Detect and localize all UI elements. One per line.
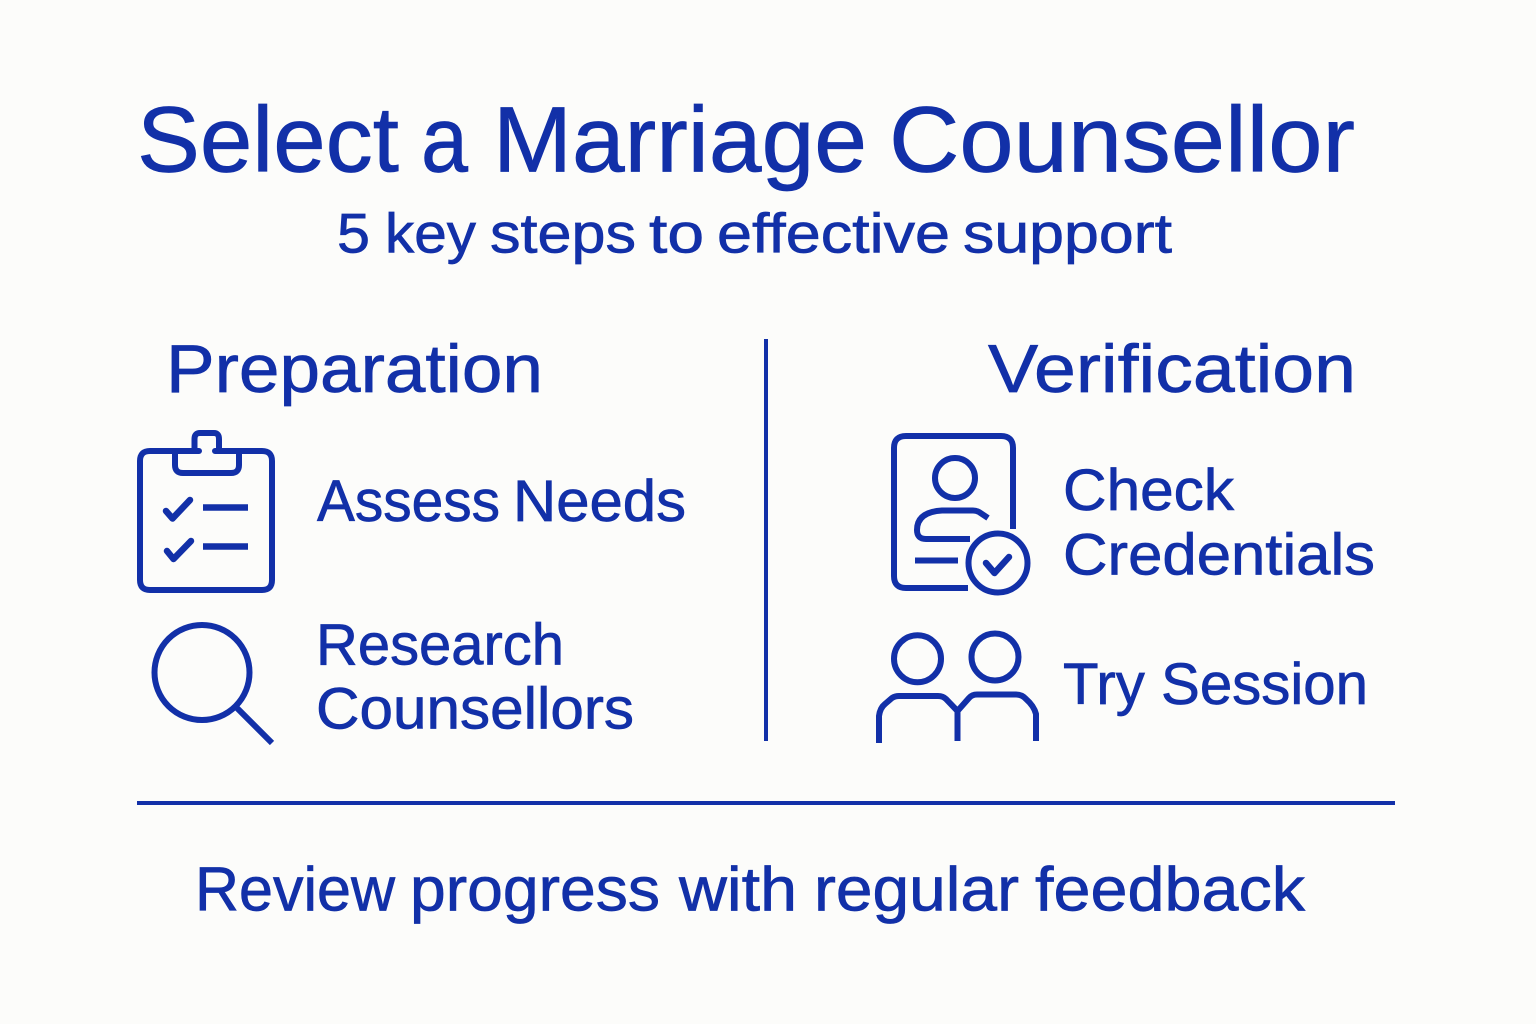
subtitle: 5 — [337, 202, 370, 264]
footer text: regular — [814, 856, 1019, 924]
vertical divider — [764, 339, 768, 741]
subtitle: key — [385, 202, 476, 264]
title — [137, 88, 1355, 192]
label: check credentials: Credentials — [1063, 522, 1375, 588]
footer text: progress — [410, 856, 660, 924]
footer text: with — [678, 856, 797, 924]
footer text: feedback — [1035, 856, 1306, 924]
horizontal divider — [137, 801, 1395, 805]
label: research counsellors — [316, 612, 634, 742]
subtitle: steps — [490, 202, 636, 264]
label: try session: Try Session — [1063, 652, 1368, 717]
footer text: Review — [195, 856, 395, 924]
subtitle: support — [963, 202, 1172, 264]
label: assess needs: Assess — [317, 469, 500, 534]
label: check credentials: Check — [1063, 458, 1235, 523]
title: Marriage — [493, 88, 867, 192]
footer text — [195, 856, 1306, 924]
label: check credentials — [1063, 458, 1375, 588]
icon: credential badge with check — [894, 436, 1028, 592]
label: research counsellors: Counsellors — [316, 676, 634, 742]
label: assess needs: Needs — [513, 469, 686, 534]
icon: magnifying glass — [154, 625, 272, 743]
subtitle — [337, 202, 1172, 264]
title: a — [421, 88, 468, 192]
panel: preparation — [140, 331, 686, 743]
title: Counsellor — [889, 88, 1355, 192]
label: assess needs — [317, 469, 686, 534]
label: research counsellors: Research — [316, 612, 564, 678]
subtitle: to — [649, 202, 704, 264]
subtitle: effective — [717, 202, 950, 264]
icon: clipboard checklist — [140, 433, 272, 590]
heading: preparation: Preparation — [166, 331, 543, 407]
icon: two people — [879, 634, 1036, 743]
title: Select — [137, 88, 399, 192]
heading: verification: Verification — [988, 331, 1356, 407]
panel: verification — [879, 331, 1375, 743]
